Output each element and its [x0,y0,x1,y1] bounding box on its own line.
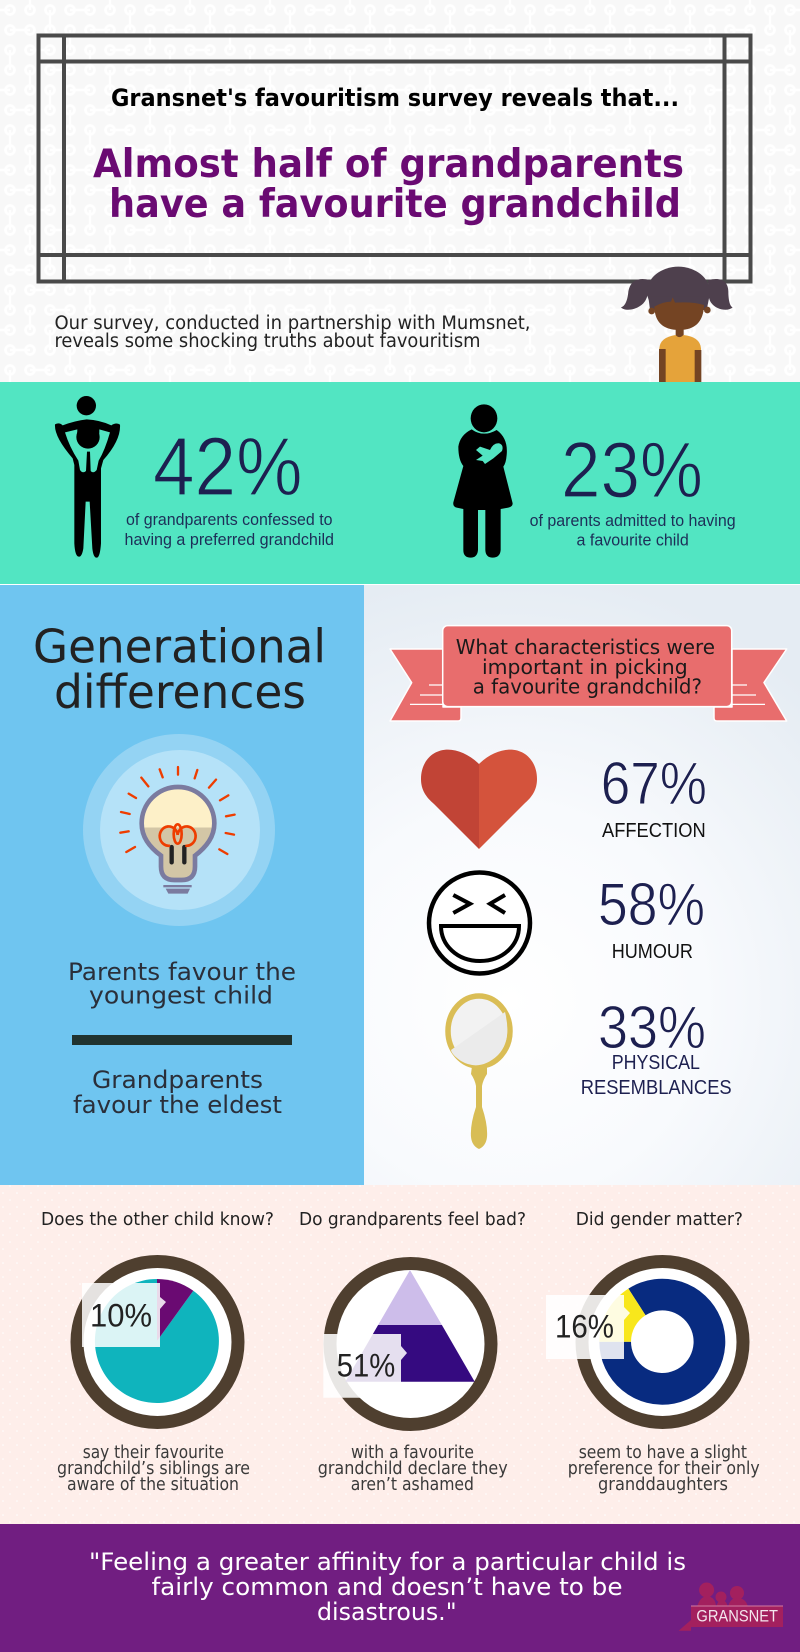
icon: hand mirror [448,996,510,1149]
quote [89,1548,686,1626]
header intro line: Gransnet's favouritism survey reveals that... [111,84,679,112]
header frame [38,35,751,282]
panel: headline statistics [0,382,800,584]
title [93,142,684,227]
column: do grandparents feel bad: 51% [337,1348,395,1384]
panel: survey questions [0,1185,800,1524]
column: did gender matter: 16% [555,1309,614,1345]
column: does the other child know [41,1210,274,1495]
ribbon banner [390,626,787,721]
stat: affection: 67% [601,750,707,817]
column: does the other child know: say their favourite [83,1443,224,1463]
ribbon banner: important in picking [482,655,688,679]
column: does the other child know: Does the other child know? [41,1210,274,1230]
title: have a favourite grandchild [109,182,681,227]
quote: fairly common and doesn’t have to be [152,1573,622,1601]
caption: grandparents: of grandparents confessed to [126,510,332,529]
text: parents favour youngest: youngest child [89,982,273,1010]
text: grandparents favour eldest [73,1066,282,1119]
survey description: reveals some shocking truths about favouritism [54,331,480,352]
icon: man carrying child on shoulders [55,396,120,558]
column: does the other child know: aware of the situation [67,1475,239,1495]
panel: quote footer [0,1524,800,1652]
column: do grandparents feel bad: aren’t ashamed [351,1475,474,1495]
stat: physical resemblances: 33% [598,994,706,1061]
logo: Gransnet [679,1582,783,1631]
column: did gender matter [546,1210,760,1495]
column: does the other child know: grandchild’s siblings are [57,1459,250,1479]
stat: humour: HUMOUR [612,941,693,963]
heading: generational differences [33,620,326,719]
text: grandparents favour eldest: favour the eldest [73,1091,282,1119]
survey description [54,313,530,352]
column: do grandparents feel bad: grandchild declare they [318,1459,508,1479]
stat: affection: AFFECTION [602,820,706,842]
panel: characteristics [364,585,800,1185]
caption: parents: a favourite child [576,531,689,550]
icon: girl with pigtails [621,267,733,382]
stat: 23%: 23% [561,425,703,514]
stat: affection [601,750,707,842]
title: Almost half of grandparents [93,142,684,187]
column: did gender matter: granddaughters [598,1475,728,1495]
text: parents favour youngest: Parents favour the [68,958,296,986]
column: did gender matter: preference for their only [568,1459,760,1479]
caption: grandparents: having a preferred grandchild [124,530,334,549]
quote: disastrous." [317,1598,457,1626]
column: does the other child know: 10% [90,1298,152,1334]
icon: mother holding baby [453,404,513,558]
stat: 42%: 42% [153,420,302,513]
panel: generational differences [0,585,364,1185]
column: do grandparents feel bad: with a favourite [351,1443,474,1463]
column: did gender matter: seem to have a slight [579,1443,747,1463]
heading: generational differences: Generational [33,620,326,674]
column: do grandparents feel bad: Do grandparents feel bad? [299,1210,526,1230]
survey description: Our survey, conducted in partnership with Mumsnet, [54,313,530,334]
caption: parents: of parents admitted to having [530,511,736,530]
icon: heart [421,750,537,849]
column: did gender matter: Did gender matter? [576,1210,743,1230]
stat: physical resemblances: PHYSICAL [612,1052,700,1074]
stat: physical resemblances [581,994,732,1099]
divider bar [72,1035,292,1045]
panel: header background [0,0,800,382]
heading: generational differences: differences [54,665,306,719]
ribbon banner: What characteristics were [456,635,715,659]
ribbon banner: a favourite grandchild? [473,675,702,699]
stat: humour [598,871,705,963]
text: parents favour youngest [68,958,296,1010]
stat: humour: 58% [598,871,705,938]
icon: light bulb [83,734,275,926]
column: do grandparents feel bad [299,1210,526,1495]
stat: physical resemblances: RESEMBLANCES [581,1077,732,1099]
logo: Gransnet: GRANSNET [696,1607,778,1626]
icon: laughing face [429,872,530,974]
quote: "Feeling a greater affinity for a particular child is [89,1548,686,1576]
text: grandparents favour eldest: Grandparents [92,1066,263,1094]
caption: grandparents [124,510,334,549]
caption: parents [530,511,736,550]
